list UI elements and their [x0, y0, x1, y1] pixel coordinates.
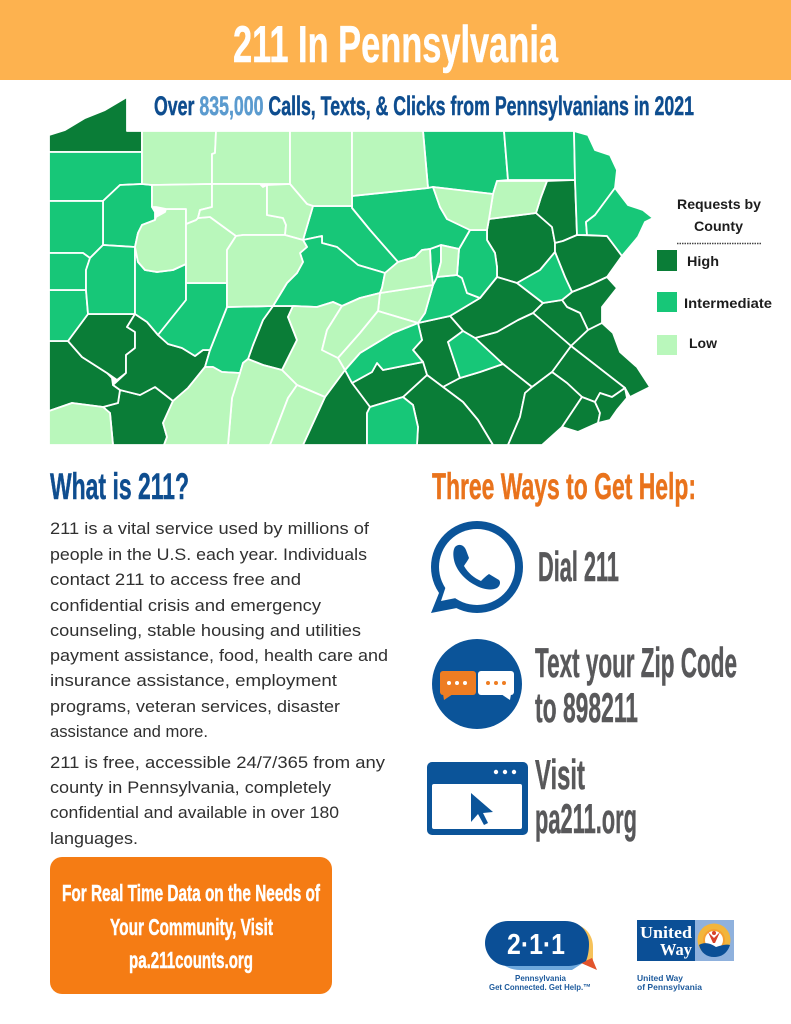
heading: what is 211: What is 211?	[50, 466, 189, 507]
body text: description: 211 is a vital service used by millions of	[50, 520, 369, 538]
logo: United Way of Pennsylvania: United Way	[637, 973, 683, 983]
call-to-action box	[50, 857, 332, 994]
label: text your zip code	[535, 639, 737, 731]
body text: description: contact 211 to access free and	[50, 571, 301, 589]
logo: 211 Pennsylvania: 2·1·1	[507, 929, 565, 961]
logo: 211 Pennsylvania: Get Connected. Get Help.™	[489, 982, 591, 992]
intermediate-request counties	[49, 131, 653, 445]
label: visit pa211.org: Visit	[535, 751, 585, 798]
call-to-action box: pa.211counts.org	[129, 947, 253, 973]
body text: description: 211 is free, accessible 24/7/365 from any	[50, 754, 386, 772]
icon: browser window with cursor	[427, 762, 528, 835]
logo: United Way of Pennsylvania: Way	[660, 940, 692, 959]
title banner: 211 In Pennsylvania	[233, 16, 559, 74]
body text: description: people in the U.S. each year. Individuals	[50, 546, 367, 564]
body text: description: confidential crisis and emergency	[50, 597, 322, 615]
label: text your zip code: to 898211	[535, 684, 638, 731]
call-to-action box: Your Community, Visit	[110, 914, 273, 940]
logo: 211 Pennsylvania: Pennsylvania	[515, 973, 566, 983]
body text: description: payment assistance, food, health care and	[50, 647, 388, 665]
choropleth map of Pennsylvania counties	[49, 97, 653, 445]
body text: description	[50, 520, 388, 848]
body text: description: confidential and available in over 180	[50, 804, 339, 822]
high-request counties	[49, 97, 650, 445]
map legend: County	[694, 218, 743, 234]
logo: 211 Pennsylvania	[485, 921, 597, 992]
body text: description: assistance and more.	[50, 723, 208, 741]
logo: United Way of Pennsylvania: of Pennsylvania	[637, 982, 702, 992]
call-to-action box: For Real Time Data on the Needs of	[62, 880, 320, 906]
label: visit pa211.org	[535, 751, 637, 842]
map legend: High	[687, 253, 719, 269]
map legend: Requests by	[677, 196, 761, 212]
map legend: Low	[689, 335, 717, 351]
map legend: Intermediate	[684, 295, 772, 311]
logo: United Way of Pennsylvania	[637, 920, 734, 992]
label: visit pa211.org: pa211.org	[535, 795, 637, 842]
body text: description: counseling, stable housing and utilities	[50, 622, 361, 640]
body text: description: county in Pennsylvania, completely	[50, 779, 332, 797]
title banner	[0, 0, 791, 80]
low-request counties	[49, 131, 547, 445]
icon: text message bubbles	[432, 639, 522, 729]
body text: description: programs, veteran services, disaster	[50, 698, 341, 716]
label: dial 211: Dial 211	[538, 543, 619, 590]
body text: description: insurance assistance, employment	[50, 672, 337, 690]
icon: phone in speech bubble	[431, 521, 523, 613]
logo: United Way of Pennsylvania: United	[640, 923, 693, 942]
map legend	[657, 196, 772, 355]
body text: description: languages.	[50, 830, 138, 848]
